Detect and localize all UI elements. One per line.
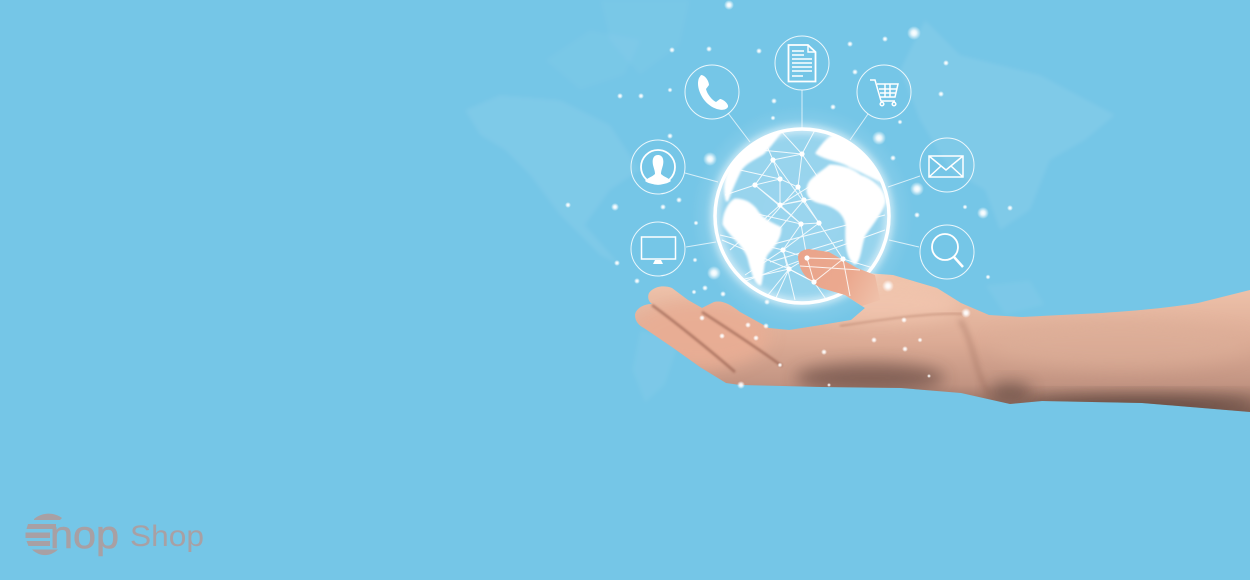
faint world map	[465, 0, 1115, 403]
icon: magnifier	[920, 225, 974, 279]
logo mark: striped globe	[26, 514, 62, 555]
globe halo	[690, 104, 914, 328]
icon: person	[631, 140, 685, 194]
network lines	[720, 130, 885, 305]
globe	[715, 129, 889, 305]
icon: phone	[685, 65, 739, 119]
icon: envelope	[920, 138, 974, 192]
logo label: Shop	[130, 520, 204, 553]
sparkles	[565, 0, 1013, 389]
hand and arm	[635, 273, 1250, 412]
network nodes	[752, 151, 822, 272]
continents	[724, 130, 884, 284]
thumb over globe	[789, 249, 880, 306]
logo wordmark: nop	[50, 514, 119, 557]
connector lines	[685, 90, 920, 247]
icon: monitor	[631, 222, 685, 276]
icon: shopping cart	[857, 65, 911, 119]
logo: nop Shop	[26, 514, 204, 557]
icon: document	[775, 36, 829, 90]
